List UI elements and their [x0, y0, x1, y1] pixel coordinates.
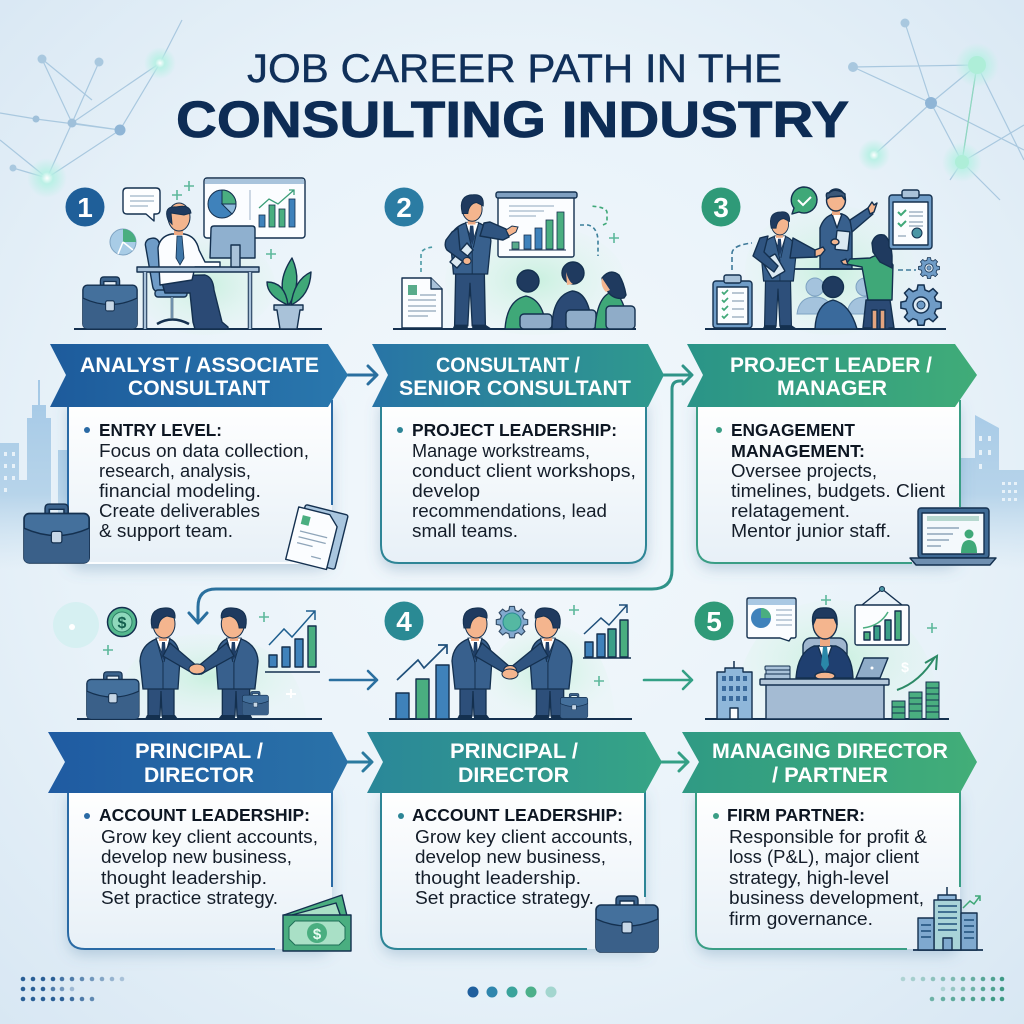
route connector from step 3 to row 2 — [189, 381, 682, 623]
arrow: banner 1 to banner 2 — [348, 366, 377, 384]
card text: & support team. — [99, 521, 233, 541]
step number 1: 1 — [77, 192, 93, 223]
laptop — [856, 658, 888, 678]
growth bars — [265, 611, 320, 672]
panel: analyst card — [50, 344, 348, 564]
title — [176, 47, 849, 148]
panel: consultant card — [372, 344, 664, 563]
card text: small teams. — [412, 521, 518, 541]
banner 1: CONSULTANT — [128, 376, 270, 400]
banner 1 — [50, 344, 348, 407]
icon: briefcase on card — [596, 896, 658, 952]
chair — [144, 237, 189, 324]
executive — [796, 608, 853, 680]
small briefcase — [560, 693, 588, 718]
banner 6: / PARTNER — [772, 763, 888, 787]
person at desk — [158, 203, 228, 329]
scene 5: handshake with charts — [384, 602, 632, 719]
sparkles — [103, 612, 296, 698]
card text: Manage workstreams, — [412, 441, 590, 461]
card text: FIRM PARTNER: — [727, 805, 865, 825]
card text: ENGAGEMENT — [731, 420, 855, 440]
card text — [716, 420, 945, 541]
card text: strategy, high-level — [729, 868, 889, 888]
card text: ACCOUNT LEADERSHIP: — [412, 805, 623, 825]
card text — [713, 805, 927, 929]
monitor — [210, 226, 255, 267]
banner 4 — [48, 732, 348, 793]
card text — [398, 805, 633, 908]
banner 3: MANAGER — [777, 376, 887, 400]
sparkles — [172, 181, 276, 259]
card text: Grow key client accounts, — [415, 827, 633, 847]
icon: document — [402, 278, 442, 328]
card text: Grow key client accounts, — [101, 827, 318, 847]
growth bars left — [396, 645, 449, 719]
banner 2 — [372, 344, 664, 407]
card text: develop new business, — [101, 847, 292, 867]
card text: thought leadership. — [101, 868, 267, 888]
banner 6: MANAGING DIRECTOR — [712, 739, 948, 763]
icon: clipboard left — [713, 275, 752, 328]
banner 2: CONSULTANT / — [436, 353, 580, 377]
card text: Focus on data collection, — [99, 441, 309, 461]
card text — [397, 420, 636, 541]
handshake people — [452, 608, 572, 719]
network decoration: top left — [0, 20, 182, 198]
card text: business development, — [729, 888, 924, 908]
card text: Mentor junior staff. — [731, 521, 891, 541]
icon: money — [283, 895, 351, 951]
card text: thought leadership. — [415, 868, 581, 888]
icon: pie bubble — [747, 598, 796, 641]
sparkle — [609, 233, 619, 243]
card text — [84, 805, 318, 908]
coin stacks and arrow — [892, 656, 939, 719]
dots bottom left — [21, 977, 124, 1001]
panel: principal card one — [48, 732, 348, 949]
card text: financial modeling. — [99, 481, 261, 501]
icon: small pie — [110, 229, 136, 255]
scene 3: project leader — [702, 187, 946, 335]
chart board — [204, 178, 305, 238]
network decoration: top right — [848, 18, 1024, 200]
icon: dollar coin — [108, 608, 136, 636]
audience silhouettes — [797, 278, 883, 314]
step number 4: 4 — [396, 606, 412, 637]
growth bars right — [583, 605, 631, 658]
card text: timelines, budgets. Client — [731, 481, 945, 501]
seated person — [815, 276, 857, 329]
small briefcase — [242, 691, 268, 715]
panel: principal card two — [367, 732, 662, 949]
step number 2: 2 — [396, 192, 412, 223]
step number 1 — [66, 188, 104, 226]
title: JOB CAREER PATH IN THE — [247, 47, 782, 91]
dots bottom right — [901, 977, 1004, 1001]
step number 5: 5 — [706, 606, 722, 637]
icon: documents — [286, 503, 348, 571]
card text: develop — [412, 481, 480, 501]
panel: managing director card — [682, 732, 977, 949]
arrow: scene 5 to scene 6 — [644, 671, 692, 689]
papers — [765, 666, 790, 679]
card text: research, analysis, — [99, 461, 251, 481]
icon: city building — [717, 661, 752, 719]
banner 4: PRINCIPAL / — [135, 739, 263, 763]
banner 5: PRINCIPAL / — [450, 739, 578, 763]
card text — [84, 420, 309, 541]
banner 6 — [682, 732, 977, 793]
banner 4: DIRECTOR — [144, 763, 254, 787]
step number 3 — [702, 188, 740, 226]
icon: briefcase — [87, 672, 139, 719]
dots bottom centre — [468, 986, 556, 998]
arrow: banner 4 to banner 5 — [346, 753, 372, 771]
banner 1: ANALYST / ASSOCIATE — [80, 353, 319, 377]
icon: office towers — [913, 887, 983, 950]
icon: large briefcase left — [24, 504, 89, 563]
card text: relatagement. — [731, 501, 850, 521]
presentation board — [496, 192, 577, 257]
dashed arrows — [421, 206, 607, 272]
icon: plant — [267, 258, 311, 329]
icon: gears — [901, 258, 941, 325]
step number 3: 3 — [713, 192, 729, 223]
card text: firm governance. — [729, 909, 873, 929]
card text: conduct client workshops, — [412, 461, 636, 481]
card text: ACCOUNT LEADERSHIP: — [99, 805, 310, 825]
presenter — [445, 195, 518, 329]
handshake people — [140, 608, 258, 719]
card text: develop new business, — [415, 847, 606, 867]
dashed links — [732, 243, 916, 270]
chart frame — [855, 586, 909, 645]
icon: clipboard right — [889, 190, 932, 249]
skyline right — [960, 415, 1024, 570]
step number 5 — [694, 602, 734, 640]
skyline left — [0, 380, 68, 570]
scene 6: managing director — [694, 586, 949, 719]
banner 3 — [687, 344, 977, 407]
card text: Create deliverables — [99, 501, 260, 521]
card text: PROJECT LEADERSHIP: — [412, 420, 617, 440]
card text: Set practice strategy. — [101, 888, 278, 908]
sparkles — [569, 605, 604, 686]
card text: Oversee projects, — [731, 461, 877, 481]
card text: loss (P&L), major client — [729, 847, 919, 867]
title: CONSULTING INDUSTRY — [176, 91, 849, 148]
icon: briefcase — [83, 277, 137, 328]
sparkles — [821, 595, 937, 675]
woman — [841, 235, 894, 329]
glow orb — [53, 602, 99, 648]
banner 5: DIRECTOR — [458, 763, 569, 787]
step number 2 — [384, 188, 424, 226]
step number 4 — [384, 602, 424, 640]
banner 5 — [367, 732, 662, 793]
desk — [760, 679, 889, 719]
arrow: banner 2 to banner 3 — [662, 366, 692, 384]
card text: Set practice strategy. — [415, 888, 594, 908]
arrow: scene 4 to scene 5 — [330, 671, 377, 689]
audience — [505, 262, 635, 329]
arrow: banner 5 to banner 6 — [660, 753, 688, 771]
icon: speech bubble — [123, 188, 160, 221]
icon: laptop — [910, 508, 996, 565]
card text: recommendations, lead — [412, 501, 607, 521]
icon: money: $ — [313, 926, 322, 943]
scene 4: handshake — [53, 602, 322, 719]
manager left — [753, 212, 825, 329]
card text: Responsible for profit & — [729, 827, 927, 847]
card text: ENTRY LEVEL: — [99, 420, 222, 440]
scene 1: analyst at desk — [66, 178, 322, 335]
banner 3: PROJECT LEADER / — [730, 353, 932, 377]
icon: check bubble — [791, 187, 817, 214]
presenter on platform — [795, 189, 880, 269]
icon: teal gear — [496, 606, 528, 638]
icon: dollar coin: $ — [118, 615, 127, 632]
panel: project leader card — [687, 344, 977, 563]
banner 2: SENIOR CONSULTANT — [399, 376, 631, 400]
desk — [137, 267, 259, 329]
scene 2: consultant presenting — [384, 188, 636, 335]
card text: MANAGEMENT: — [731, 441, 865, 461]
sparkles: $ — [901, 659, 909, 675]
